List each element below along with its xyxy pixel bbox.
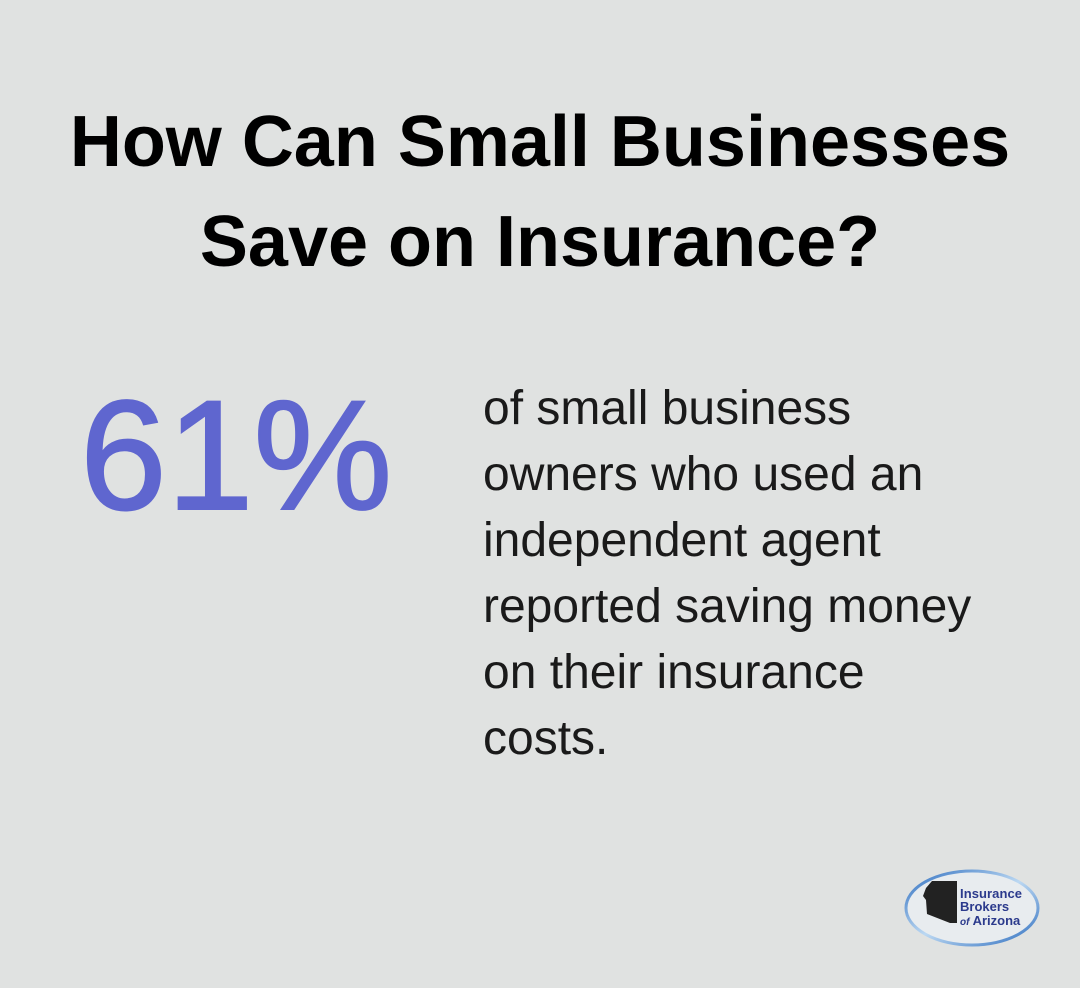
title: How Can Small Businesses — [70, 102, 1010, 182]
description text: reported saving money — [483, 580, 971, 633]
title: Save on Insurance? — [200, 202, 880, 282]
logo: Brokers — [960, 899, 1009, 914]
logo: Insurance — [960, 886, 1022, 901]
logo: of Arizona — [960, 913, 1021, 928]
description text — [483, 382, 972, 765]
description text: costs. — [483, 712, 608, 765]
logo — [904, 870, 1040, 946]
description text: owners who used an — [483, 448, 923, 501]
description text: of small business — [483, 382, 851, 435]
title — [70, 102, 1010, 282]
description text: independent agent — [483, 514, 881, 567]
big stat: 61% — [80, 369, 392, 543]
description text: on their insurance — [483, 646, 865, 699]
